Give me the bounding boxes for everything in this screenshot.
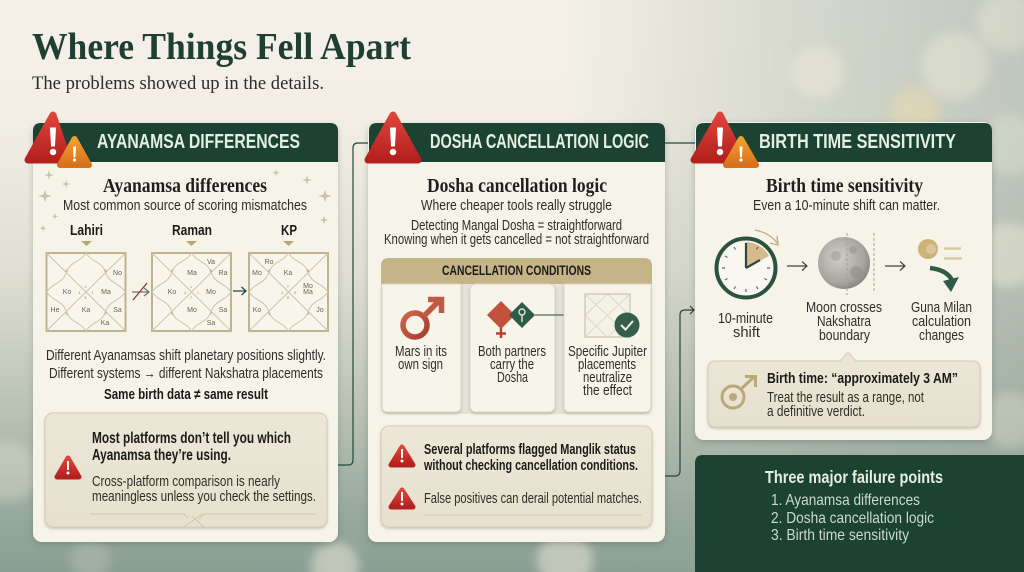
- panel subheading: Where cheaper tools really struggle: [421, 197, 612, 214]
- chart: KP kundli: Mo: [252, 270, 262, 277]
- chart: Raman kundli: 2: [171, 269, 173, 273]
- label: Lahiri: Lahiri: [70, 222, 103, 239]
- label: Raman: [172, 222, 212, 246]
- callout text: False positives can derail potential matches.: [424, 491, 642, 507]
- chart: KP kundli: Ro: [265, 259, 274, 266]
- step label: moon crosses nakshatra boundary: boundary: [819, 328, 871, 344]
- box header text: CANCELLATION CONDITIONS: [442, 263, 591, 278]
- icon: warning triangle: [391, 447, 413, 465]
- callout bold text: without checking cancellation conditions.: [423, 458, 638, 474]
- explanation text: Different systems → different Nakshatra placements: [49, 365, 323, 382]
- step label: 10-minute shift: 10-minute: [718, 311, 773, 327]
- chart: Raman kundli: 7: [210, 312, 212, 316]
- chart: KP kundli: [249, 253, 328, 331]
- panel: birth time sensitivity: [694, 115, 992, 440]
- icon: chart with check mark: [585, 294, 640, 338]
- summary list: [771, 492, 934, 544]
- chart: Lahiri kundli: He: [51, 307, 60, 314]
- callout text: a definitive verdict.: [767, 404, 865, 420]
- chart: KP kundli: 4: [307, 312, 309, 316]
- chart: Lahiri kundli: 4: [79, 291, 81, 295]
- chart: Lahiri kundli: 8: [105, 269, 107, 273]
- explanation text: Same birth data ≠ same result: [104, 386, 268, 403]
- card text: [478, 344, 546, 386]
- chart: KP kundli: Ko: [253, 307, 261, 314]
- box header: [381, 258, 652, 284]
- chart: Raman kundli: Mo: [206, 289, 216, 296]
- subtitle: The problems showed up in the details.: [32, 73, 324, 94]
- chart: KP kundli: Mo: [303, 283, 313, 290]
- explanation text: [46, 347, 326, 403]
- step label: moon crosses nakshatra boundary: [806, 300, 882, 344]
- panel: ayanamsa differences: [28, 115, 338, 542]
- connector arrow: panel 2 to panel 3: [664, 142, 697, 144]
- chart: KP kundli: 7: [287, 285, 289, 289]
- panel heading: Ayanamsa differences: [103, 176, 267, 197]
- chart: Lahiri kundli: [46, 253, 126, 331]
- chart: Raman kundli: 1: [197, 291, 199, 295]
- card text: [568, 344, 647, 399]
- chart: Lahiri kundli: Sa: [113, 307, 122, 314]
- chart: Raman kundli: 1: [190, 285, 192, 289]
- chart: KP kundli: Jo: [316, 307, 324, 314]
- chart: Raman kundli: Ra: [219, 270, 228, 277]
- detection versus cancellation text: Knowing when it gets cancelled = not straightforward: [384, 232, 649, 248]
- callout bold text: [423, 442, 638, 474]
- icon: not-equal crossed arrows: [132, 283, 149, 300]
- panel: dosha cancellation logic: [368, 115, 665, 542]
- label: KP: KP: [281, 222, 297, 239]
- summary list: 3. Birth time sensitivity: [771, 527, 909, 544]
- chart: KP kundli: Ma: [303, 289, 313, 296]
- chart: Raman kundli: Ma: [187, 270, 197, 277]
- chart: Lahiri kundli: Ko: [63, 289, 71, 296]
- summary list: 2. Dosha cancellation logic: [771, 510, 934, 527]
- label: KP: [281, 222, 297, 246]
- chart: Raman kundli: [152, 253, 231, 331]
- decorative sparkles: [38, 169, 332, 232]
- step label: guna milan calculation changes: calculation: [912, 314, 971, 330]
- header text: AYANAMSA DIFFERENCES: [97, 131, 300, 153]
- card text: neutralize: [583, 370, 632, 386]
- chart: Lahiri kundli: 3: [66, 312, 68, 316]
- explanation text: Different Ayanamsas shift planetary positions slightly.: [46, 347, 326, 364]
- chart: Lahiri kundli: 1: [85, 285, 87, 289]
- chart: KP kundli: 8: [287, 296, 289, 300]
- chart: KP kundli: 5: [294, 291, 296, 295]
- callout: platforms do not disclose: [45, 413, 327, 527]
- arrow: clock to moon: [787, 262, 807, 270]
- callout text: [767, 370, 958, 420]
- arrow: moon to calculation: [885, 262, 905, 270]
- chart: Raman kundli: 3: [171, 312, 173, 316]
- icon: warning triangle: [57, 458, 79, 477]
- chart: Lahiri kundli: No: [113, 270, 122, 277]
- chart: Raman kundli: Mo: [187, 307, 197, 314]
- icon: paired diamonds and arrow: [487, 301, 578, 338]
- panel subheading: Even a 10-minute shift can matter.: [753, 197, 940, 214]
- header text: DOSHA CANCELLATION LOGIC: [430, 131, 649, 153]
- card text: Specific Jupiter: [568, 344, 647, 360]
- callout text: Cross-platform comparison is nearly: [92, 474, 281, 490]
- callout: manglik false positives: [381, 426, 652, 527]
- chart: Lahiri kundli: Ka: [82, 307, 90, 314]
- card text: [395, 344, 447, 373]
- chart: Raman kundli: 8: [210, 269, 212, 273]
- icon: mars symbol: [403, 300, 442, 337]
- header text: BIRTH TIME SENSITIVITY: [759, 131, 957, 153]
- chart: Raman kundli: 4: [184, 291, 186, 295]
- connector arrow: panel 1 to panel 2: [327, 143, 370, 465]
- panel heading: Dosha cancellation logic: [427, 176, 607, 197]
- label: Raman: Raman: [172, 222, 212, 239]
- card text: placements: [578, 357, 636, 373]
- callout text: Most platforms don’t tell you which: [92, 430, 291, 447]
- connector arrow: panel 2 callout to panel 3: [651, 306, 694, 476]
- panel subheading: Most common source of scoring mismatches: [63, 197, 307, 214]
- step label: guna milan calculation changes: Guna Milan: [911, 300, 972, 316]
- card: both partners carry the dosha: [470, 284, 578, 412]
- chart: KP kundli: 9: [268, 269, 270, 273]
- chart: KP kundli: 3: [268, 312, 270, 316]
- label: Lahiri: [70, 222, 103, 246]
- step label: guna milan calculation changes: changes: [919, 328, 964, 344]
- chart: Raman kundli: Ko: [168, 289, 176, 296]
- icon: red and orange warning triangles: [28, 115, 89, 165]
- callout text: [92, 430, 316, 505]
- step label: moon crosses nakshatra boundary: Nakshatra: [817, 314, 872, 330]
- summary list: 1. Ayanamsa differences: [771, 492, 920, 509]
- chart: Raman kundli: Va: [207, 259, 215, 266]
- panel header bar: [696, 123, 992, 162]
- panel: three major failure points: [695, 455, 1024, 572]
- callout bold text: Several platforms flagged Manglik status: [424, 442, 636, 458]
- summary heading: Three major failure points: [765, 467, 943, 487]
- chart: Raman kundli: Sa: [207, 320, 215, 327]
- icon: red warning triangle: [368, 115, 418, 160]
- detection versus cancellation text: [384, 218, 649, 248]
- callout text: Treat the result as a range, not: [767, 390, 924, 406]
- panel header bar: [369, 123, 665, 162]
- icon: tan mars symbol: [722, 376, 756, 408]
- callout text: meaningless unless you check the settings.: [92, 489, 316, 505]
- callout text: Ayanamsa they’re using.: [92, 447, 231, 464]
- callout text: Birth time: “approximately 3 AM”: [767, 370, 958, 387]
- chart: Lahiri kundli: 1: [92, 291, 94, 295]
- title: Where Things Fell Apart: [32, 26, 411, 68]
- chart: Lahiri kundli: 2: [66, 269, 68, 273]
- step label: moon crosses nakshatra boundary: Moon crosses: [806, 300, 882, 316]
- card: specific Jupiter placements: [564, 284, 651, 412]
- panel heading: Birth time sensitivity: [766, 176, 923, 197]
- step label: 10-minute shift: shift: [733, 325, 760, 341]
- chart: Lahiri kundli: 7: [105, 312, 107, 316]
- card text: Dosha: [497, 370, 529, 386]
- cancellation conditions box: [381, 258, 652, 414]
- card: mars in its own sign: [382, 284, 461, 412]
- chart: KP kundli: 8: [307, 269, 309, 273]
- card text: Both partners: [478, 344, 546, 360]
- step label: 10-minute shift: [718, 311, 773, 341]
- icon: moon crossing boundary: [818, 233, 874, 295]
- card text: own sign: [398, 357, 443, 373]
- card text: carry the: [490, 357, 534, 373]
- card text: Mars in its: [395, 344, 447, 360]
- detection versus cancellation text: Detecting Mangal Dosha = straightforward: [411, 218, 622, 234]
- callout: approximate birth time: [708, 352, 980, 427]
- chart: Lahiri kundli: Ma: [101, 289, 111, 296]
- icon: red and orange warning triangles: [694, 115, 756, 165]
- chart: Lahiri kundli: Ka: [101, 320, 109, 327]
- chart: KP kundli: 4: [281, 291, 283, 295]
- chart: KP kundli: Ka: [284, 270, 292, 277]
- panel header bar: [33, 123, 338, 162]
- icon: warning triangle: [391, 490, 413, 507]
- chart: Raman kundli: 7: [190, 296, 192, 300]
- icon: arrow between charts: [233, 287, 246, 295]
- step label: guna milan calculation changes: [911, 300, 972, 344]
- icon: coins and green down arrow: [918, 239, 962, 292]
- card text: the effect: [583, 383, 632, 399]
- chart: Raman kundli: Sa: [219, 307, 227, 314]
- icon: clock with ten minute wedge: [716, 230, 778, 298]
- chart: Lahiri kundli: 5: [85, 296, 87, 300]
